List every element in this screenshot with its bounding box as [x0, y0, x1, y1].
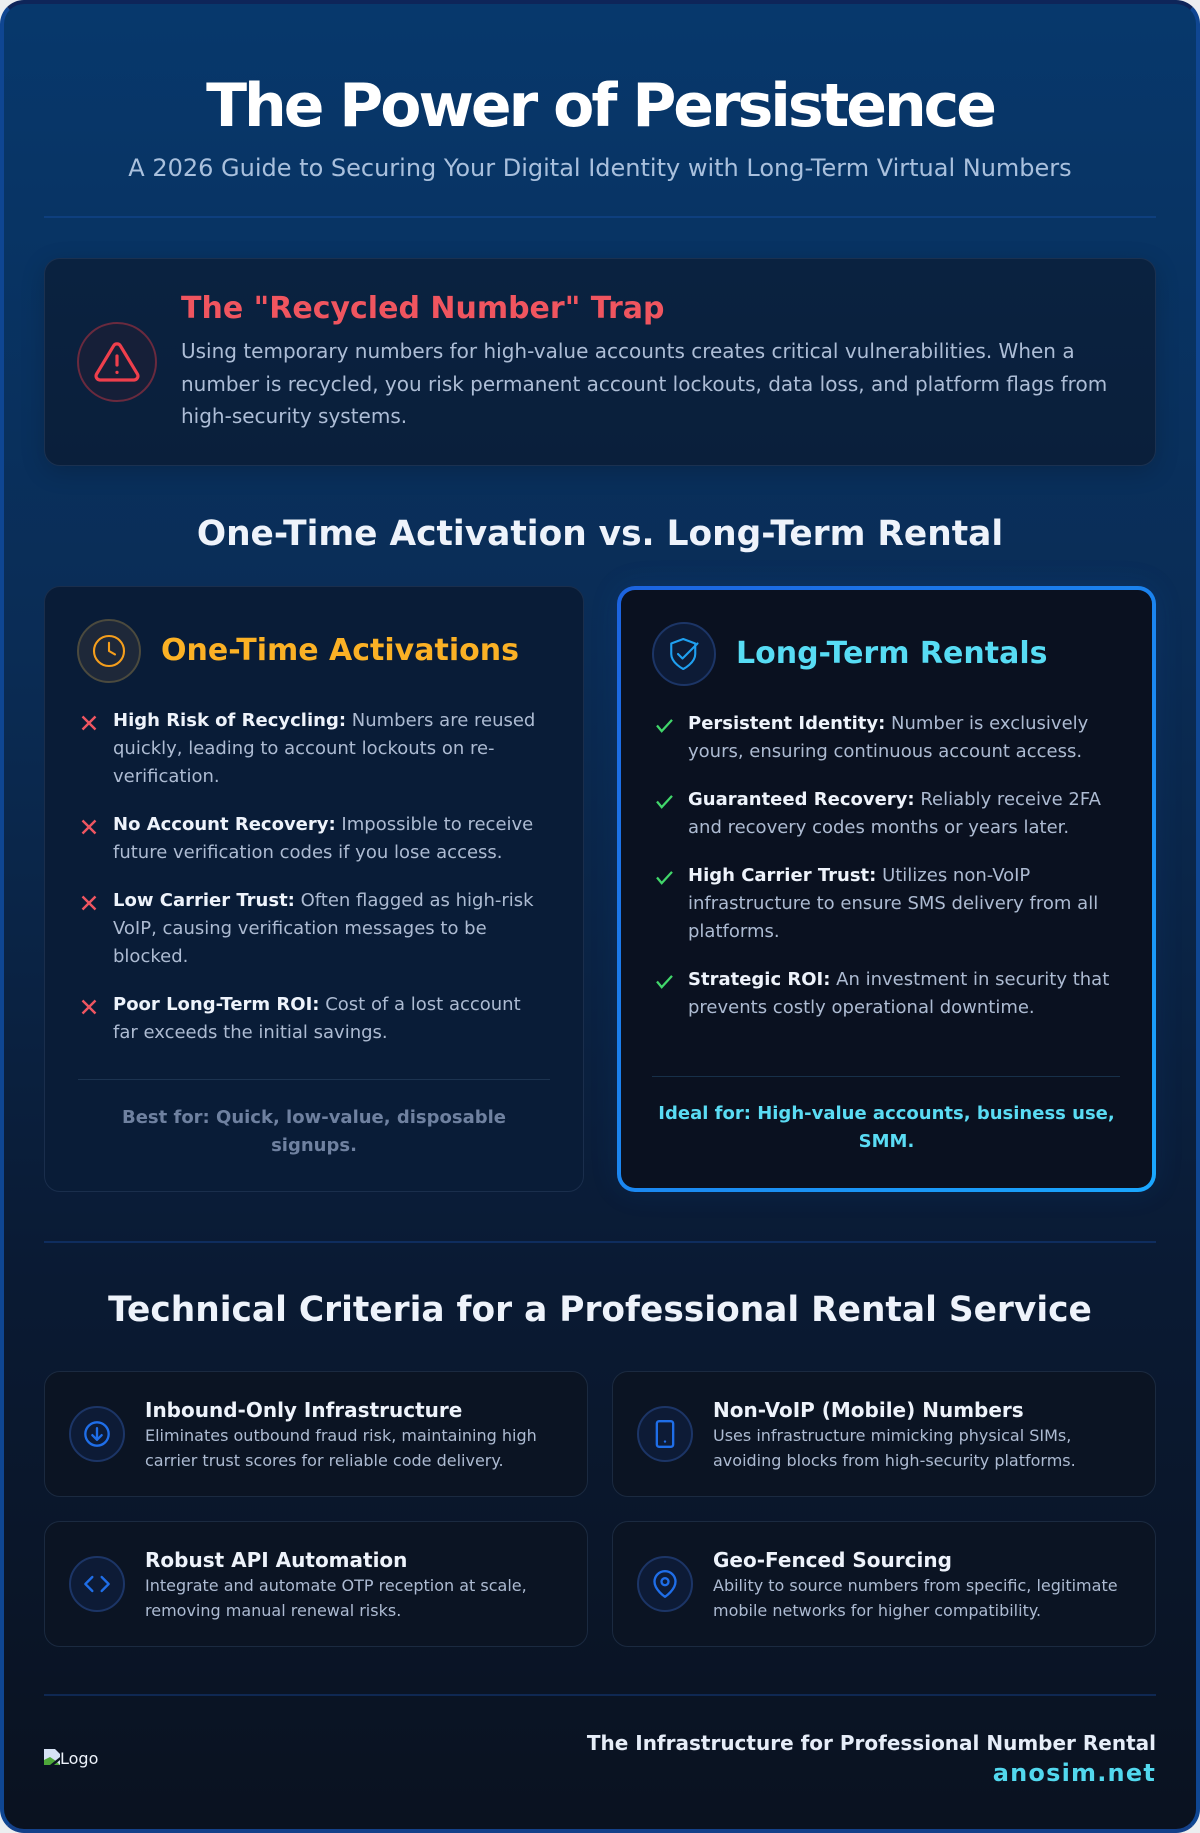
best for note: signups. [271, 1135, 357, 1156]
criterion title: Geo-Fenced Sourcing [713, 1548, 952, 1572]
item: no account recovery [113, 814, 533, 863]
icon: broken image [44, 1749, 60, 1765]
panel: recycled number warning [44, 258, 1156, 466]
item: guaranteed recovery: and recovery codes months or years later. [688, 817, 1069, 838]
panel: long-term rentals [617, 586, 1156, 1192]
footer brand url: anosim.net [993, 1759, 1156, 1787]
heading: technical criteria: Technical Criteria for a Professional Rental Service [108, 1290, 1092, 1330]
icon: check 4 [656, 975, 673, 989]
icon: location pin [637, 1556, 693, 1612]
criterion description: Integrate and automate OTP reception at scale, [145, 1576, 527, 1595]
ideal for note: SMM. [859, 1131, 914, 1152]
icon: arrow down circle [69, 1406, 125, 1462]
heading: trap: The "Recycled Number" Trap [181, 291, 664, 326]
item: high carrier trust: infrastructure to ensure SMS delivery from all [688, 893, 1098, 914]
ideal for note [658, 1103, 1115, 1152]
icon: cross 1 [82, 716, 96, 730]
logo placeholder [44, 1749, 98, 1768]
item: low carrier trust [113, 890, 534, 967]
footer tagline: The Infrastructure for Professional Number Rental [587, 1731, 1156, 1755]
item: strategic roi [688, 969, 1109, 1018]
item: low carrier trust: blocked. [113, 946, 188, 967]
icon: cross 2 [82, 820, 96, 834]
icon: code brackets [69, 1556, 125, 1612]
panel: non-voip numbers [612, 1371, 1156, 1497]
item: high carrier trust: platforms. [688, 921, 780, 942]
criterion description: carrier trust scores for reliable code delivery. [145, 1451, 504, 1470]
item: high risk of recycling: verification. [113, 766, 220, 787]
icon: warning triangle [77, 322, 157, 402]
item: poor long-term roi: Poor Long-Term ROI: Cost of a lost account [113, 994, 521, 1015]
icon: check 2 [656, 795, 673, 809]
panel: geo-fenced sourcing [612, 1521, 1156, 1647]
item: low carrier trust: VoIP, causing verification messages to be [113, 918, 487, 939]
panel: one-time activations [44, 586, 584, 1192]
item: low carrier trust: Low Carrier Trust: Often flagged as high-risk [113, 890, 534, 911]
criterion description [145, 1426, 537, 1470]
heading: one-time activations: One-Time Activations [161, 633, 519, 668]
item: high risk of recycling: High Risk of Recycling: Numbers are reused [113, 710, 535, 731]
warning body text: Using temporary numbers for high-value accounts creates critical vulnerabilities. When a [181, 339, 1075, 363]
item: guaranteed recovery [688, 789, 1101, 838]
item: persistent identity [688, 713, 1088, 762]
icon: mobile device [637, 1406, 693, 1462]
subtitle: A 2026 Guide to Securing Your Digital Identity with Long-Term Virtual Numbers [128, 154, 1072, 182]
criterion description: mobile networks for higher compatibility. [713, 1601, 1041, 1620]
criterion title: Non-VoIP (Mobile) Numbers [713, 1398, 1024, 1422]
title: The Power of Persistence [206, 71, 994, 141]
criterion description: Uses infrastructure mimicking physical SIMs, [713, 1426, 1071, 1445]
list: drawbacks [82, 710, 535, 1043]
item: no account recovery: No Account Recovery: Impossible to receive [113, 814, 533, 835]
criterion description [713, 1426, 1076, 1470]
icon: cross 3 [82, 896, 96, 910]
item: poor long-term roi [113, 994, 521, 1043]
warning body text [181, 339, 1107, 428]
criterion description: avoiding blocks from high-security platforms. [713, 1451, 1076, 1470]
icon: clock [77, 619, 141, 683]
criterion description: Ability to source numbers from specific, legitimate [713, 1576, 1118, 1595]
best for note: Best for: Quick, low-value, disposable [122, 1107, 506, 1128]
item: guaranteed recovery: Guaranteed Recovery: Reliably receive 2FA [688, 789, 1101, 810]
item: high carrier trust [688, 865, 1098, 942]
icon: cross 4 [82, 1000, 96, 1014]
criterion description [713, 1576, 1118, 1620]
criterion title: Inbound-Only Infrastructure [145, 1398, 462, 1422]
item: high carrier trust: High Carrier Trust: Utilizes non-VoIP [688, 865, 1030, 886]
list: benefits [656, 713, 1109, 1018]
item: no account recovery: future verification codes if you lose access. [113, 842, 503, 863]
item: persistent identity: Persistent Identity: Number is exclusively [688, 713, 1088, 734]
item: high risk of recycling: quickly, leading to account lockouts on re- [113, 738, 495, 759]
icon: shield check [652, 622, 716, 686]
logo alt text: Logo [60, 1749, 98, 1768]
item: persistent identity: yours, ensuring continuous account access. [688, 741, 1082, 762]
heading: comparison: One-Time Activation vs. Long-Term Rental [197, 514, 1003, 554]
warning body text: high-security systems. [181, 404, 407, 428]
item: strategic roi: prevents costly operational downtime. [688, 997, 1035, 1018]
panel: inbound-only infrastructure [44, 1371, 588, 1497]
item: poor long-term roi: far exceeds the initial savings. [113, 1022, 388, 1043]
icon: check 3 [656, 871, 673, 885]
criterion description: removing manual renewal risks. [145, 1601, 401, 1620]
heading: long-term rentals: Long-Term Rentals [736, 636, 1047, 671]
icon: check 1 [656, 719, 673, 733]
criterion description: Eliminates outbound fraud risk, maintaining high [145, 1426, 537, 1445]
best for note [122, 1107, 506, 1156]
criterion title: Robust API Automation [145, 1548, 407, 1572]
criterion description [145, 1576, 527, 1620]
item: high risk of recycling [113, 710, 535, 787]
warning body text: number is recycled, you risk permanent account lockouts, data loss, and platform flags from [181, 372, 1107, 396]
item: strategic roi: Strategic ROI: An investment in security that [688, 969, 1109, 990]
ideal for note: Ideal for: High-value accounts, business use, [658, 1103, 1115, 1124]
panel: robust api automation [44, 1521, 588, 1647]
